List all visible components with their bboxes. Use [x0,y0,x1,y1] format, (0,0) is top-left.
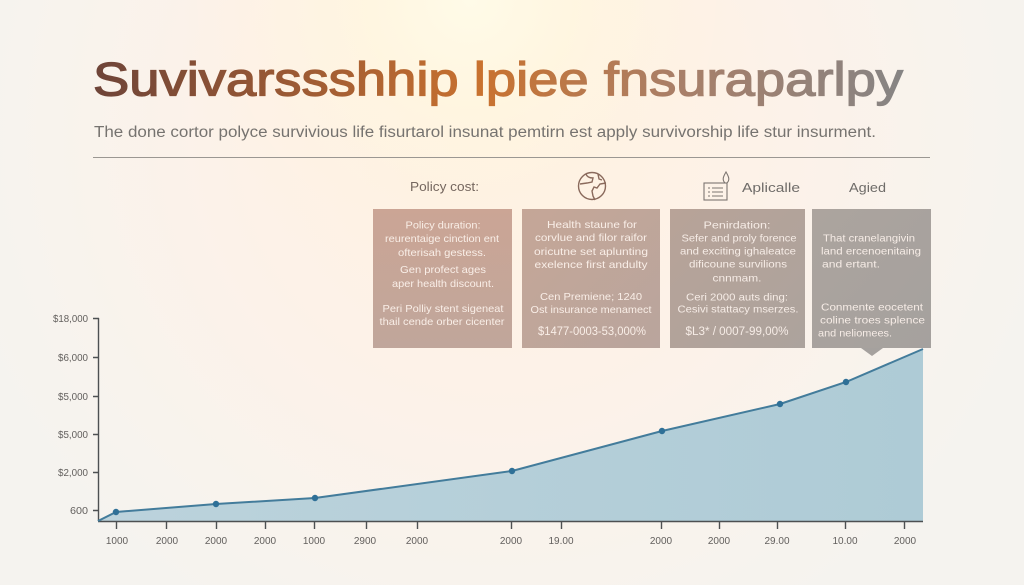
x axis with ticks and labels: 2000 [406,536,429,547]
panel: pension dation [670,209,805,348]
panel: aged, with pointer: and ertant. [822,258,880,270]
panel: aged, with pointer [812,209,931,356]
panel: pension dation: and exciting ighaleatce [680,246,796,258]
x axis with ticks and labels: 2000 [254,536,277,547]
x axis with ticks and labels: 2000 [708,536,731,547]
panel: pension dation: cnnmam. [712,272,762,284]
x axis with ticks and labels [98,522,923,547]
x axis with ticks and labels: 2000 [500,536,523,547]
panel: pension dation: Cesivi stattacy mserzes. [678,304,798,316]
panel: policy duration: ofterisah gestess. [398,247,486,259]
x axis with ticks and labels: 2000 [650,536,673,547]
x axis with ticks and labels: 2000 [894,536,917,547]
icon: document with flame [704,172,729,200]
data points [113,379,849,515]
panel: policy duration: Policy duration: [406,220,480,232]
panel: pension dation: Ceri 2000 auts ding: [686,292,788,304]
y axis with ticks and labels: $2,000 [58,468,88,479]
panel: health status: Cen Premiene; 1240 [540,291,642,303]
x axis with ticks and labels: 29.00 [764,536,790,547]
column heading: applicable: Aplicalle [742,180,800,195]
y axis with ticks and labels: $5,000 [58,430,88,441]
panel: pension dation: dificoune survilions [689,258,787,270]
panel: aged, with pointer: That cranelangivin [823,232,915,244]
x axis with ticks and labels: 2000 [205,536,228,547]
panel: health status [522,209,660,348]
panel: pension dation: Penirdation: [704,220,770,232]
y axis with ticks and labels: $18,000 [53,314,88,325]
panel: health status: exelence first andulty [534,259,648,271]
subtitle: The done cortor polyce survivious life fisurtarol insunat pemtirn est apply survivorship life stur insurment. [94,124,876,141]
panel: policy duration: reurentaige cinction ent [385,233,499,245]
panel: policy duration: aper health discount. [392,278,494,290]
panel: aged, with pointer: coline troes splence [820,314,925,326]
x axis with ticks and labels: 1000 [106,536,129,547]
y axis with ticks and labels: $6,000 [58,353,88,364]
panel: policy duration [373,209,512,348]
panel: aged, with pointer: land ercenoenitaing [821,246,921,258]
panel: health status: corvlue and filor raifor [535,232,648,244]
panel: health status: Health staune for [547,219,638,231]
x axis with ticks and labels: 19.00 [548,536,574,547]
column heading: policy cost: Policy cost: [410,180,479,194]
title: Suvivarssshhip lpiee fnsuraparlpy [93,52,904,106]
icon: globe [578,172,606,200]
chart area fill [98,349,923,521]
x axis with ticks and labels: 10.00 [832,536,858,547]
panel: health status: oricutne set aplunting [534,246,648,258]
x axis with ticks and labels: 2000 [156,536,179,547]
panel: aged, with pointer: and neliomees. [818,328,892,340]
panel: policy duration: thail cende orber cicenter [380,316,505,328]
y axis with ticks and labels: 600 [70,506,88,517]
panel: policy duration: Peri Polliy stent sigeneat [382,303,504,315]
panel: health status: Ost insurance menamect [530,304,652,316]
area chart [53,314,923,547]
panel: aged, with pointer: Conmente eocetent [821,302,923,314]
panel: pension dation: Sefer and proly forence [682,232,797,244]
trend line [98,349,923,521]
x axis with ticks and labels: 2900 [354,536,377,547]
panel: health status: $1477-0003-53,000% [538,326,646,338]
panel: pension dation: $L3* / 0007-99,00% [686,326,788,338]
y axis with ticks and labels [53,314,99,521]
header divider [93,157,930,158]
panel: policy duration: Gen profect ages [400,264,486,276]
y axis with ticks and labels: $5,000 [58,392,88,403]
column heading: aged: Agied [849,180,886,195]
x axis with ticks and labels: 1000 [303,536,326,547]
